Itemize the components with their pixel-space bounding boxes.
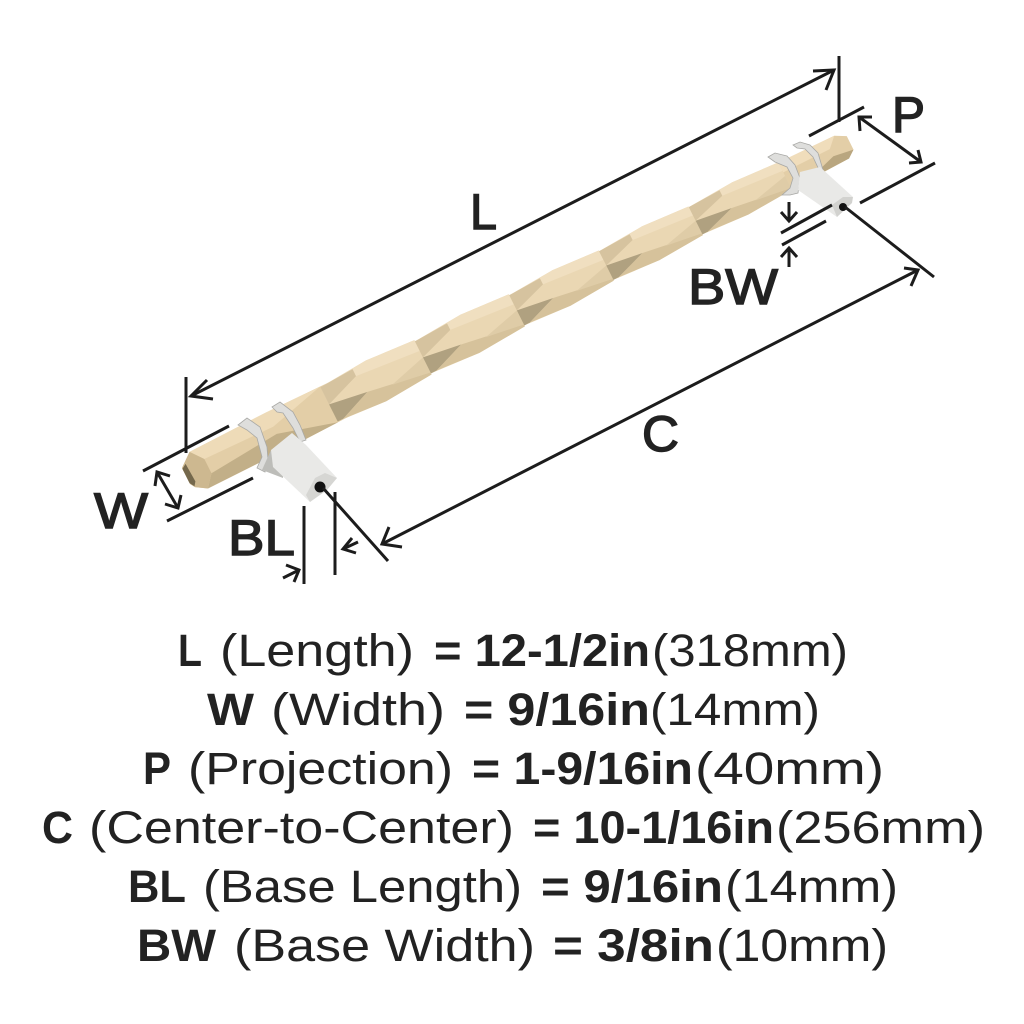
spec: width: W: [207, 684, 255, 735]
spec: projection: (Projection): [188, 743, 453, 794]
spec: center-to-center: C: [42, 802, 73, 853]
spec: center-to-center: [42, 802, 985, 853]
spec: center-to-center: = 10-1/16in: [533, 802, 774, 853]
left collar outer: [238, 418, 268, 472]
spec: length: L: [178, 625, 202, 676]
label W: W: [94, 483, 149, 539]
dimension C: [323, 207, 934, 561]
spec: width: [207, 684, 820, 735]
dimension L: [186, 56, 839, 453]
spec: center-to-center: (Center-to-Center): [89, 802, 514, 853]
dimension BL: [228, 492, 358, 584]
dimension BW: [688, 202, 832, 315]
label L: L: [470, 184, 497, 240]
label P: P: [892, 87, 925, 143]
spec: center-to-center: (256mm): [776, 802, 985, 853]
dimension W: [94, 426, 253, 539]
spec: base width: (Base Width): [234, 920, 535, 971]
left screw hole: [314, 482, 326, 492]
spec: base length: = 9/16in: [541, 861, 723, 912]
spec: base length: BL: [128, 861, 186, 912]
spec: base width: BW: [137, 920, 217, 971]
spec: base length: [128, 861, 898, 912]
dimension P: [809, 87, 935, 203]
right collar inner: [793, 142, 823, 172]
label BW: BW: [688, 259, 779, 315]
spec: projection: [143, 743, 884, 794]
label C: C: [642, 406, 679, 462]
left base post: [262, 433, 337, 502]
spec: length: = 12-1/2in: [434, 625, 650, 676]
spec: projection: P: [143, 743, 171, 794]
spec: width: (14mm): [650, 684, 820, 735]
spec: length: [178, 625, 848, 676]
right screw hole: [839, 203, 847, 211]
spec: width: = 9/16in: [464, 684, 650, 735]
right collar outer: [768, 153, 800, 195]
spec: width: (Width): [271, 684, 445, 735]
specification list: [42, 625, 985, 971]
spec: projection: = 1-9/16in: [472, 743, 693, 794]
left collar inner: [272, 402, 306, 442]
spec: projection: (40mm): [695, 743, 884, 794]
spec: base width: (10mm): [716, 920, 888, 971]
label BL: BL: [228, 510, 295, 566]
right base post: [798, 167, 853, 217]
spec: length: (Length): [220, 625, 414, 676]
spec: base length: (Base Length): [203, 861, 522, 912]
faceted bar: [176, 123, 861, 496]
spec: base width: [137, 920, 888, 971]
spec: base length: (14mm): [725, 861, 898, 912]
spec: length: (318mm): [652, 625, 848, 676]
pull handle: [176, 123, 861, 502]
spec: base width: = 3/8in: [553, 920, 714, 971]
